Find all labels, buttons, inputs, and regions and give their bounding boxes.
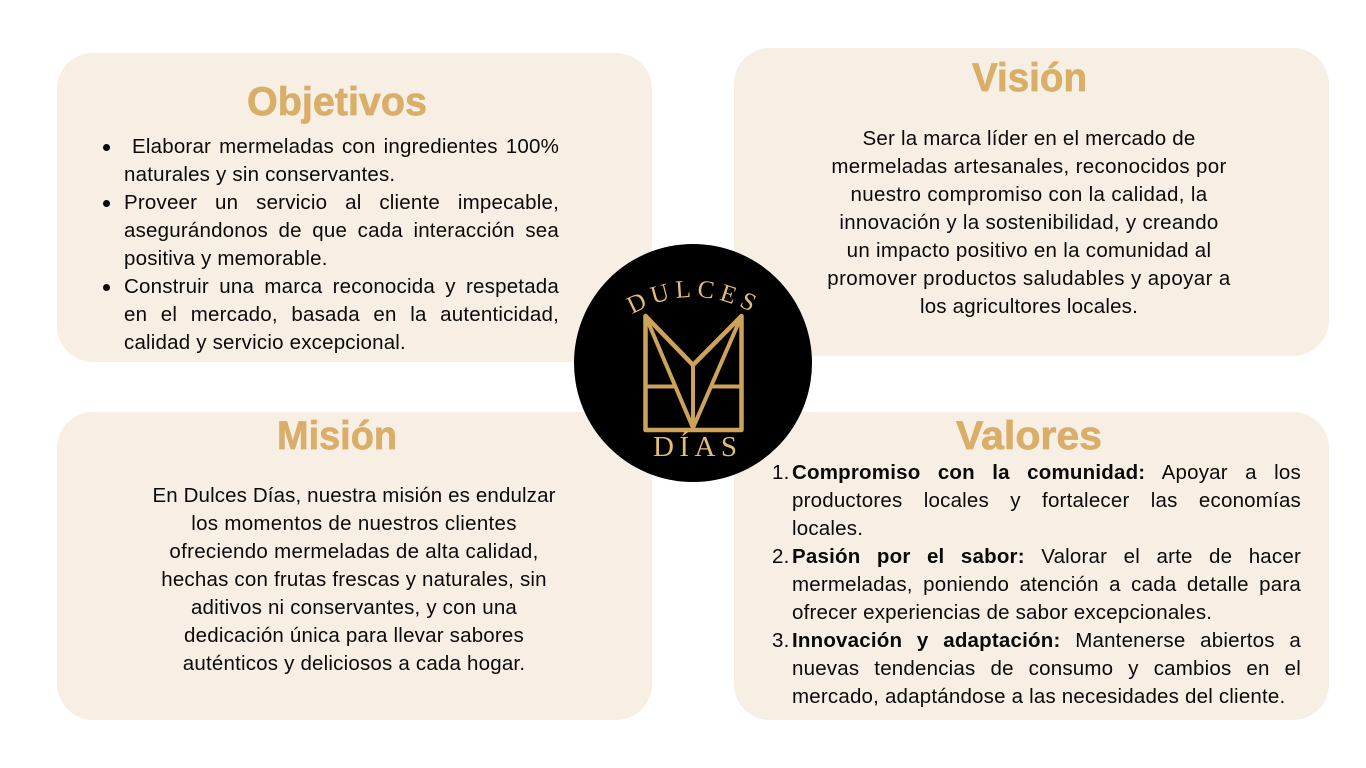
vision text: promover productos saludables y apoyar a: [827, 267, 1231, 290]
objetivos list: [103, 135, 559, 354]
vision text: [827, 127, 1231, 318]
valores list: Pasión por el sabor: Valorar el arte de hacer: [792, 545, 1301, 568]
logo text: DÍAS: DÍAS: [653, 430, 737, 463]
valores list: [772, 461, 1301, 708]
objetivos list: positiva y memorable.: [124, 247, 328, 270]
mision text: los momentos de nuestros clientes: [191, 512, 517, 535]
objetivos list: Proveer un servicio al cliente impecable,: [124, 191, 559, 214]
panel: mision: [57, 412, 652, 720]
vision text: los agricultores locales.: [920, 295, 1138, 318]
valores list: nuevas tendencias de consumo y cambios en el: [792, 657, 1301, 680]
vision text: nuestro compromiso con la calidad, la: [850, 183, 1208, 206]
valores list: mermeladas, poniendo atención a cada detalle para: [792, 573, 1301, 596]
mision text: dedicación única para llevar sabores: [184, 624, 524, 647]
valores list: ofrecer experiencias de sabor excepcionales.: [792, 601, 1212, 624]
objetivos list: en el mercado, basada en la autenticidad,: [124, 303, 559, 326]
valores list: locales.: [792, 517, 863, 540]
valores list: Compromiso con la comunidad: Apoyar a los: [792, 461, 1301, 484]
objetivos list: naturales y sin conservantes.: [124, 163, 395, 186]
heading: Visión: Visión: [972, 56, 1087, 100]
vision text: Ser la marca líder en el mercado de: [863, 127, 1195, 150]
heading: Misión: Misión: [277, 414, 397, 458]
objetivos list: Elaborar mermeladas con ingredientes 100%: [132, 135, 559, 158]
valores list: 3.: [772, 629, 790, 652]
objetivos list: Construir una marca reconocida y respetada: [124, 275, 559, 298]
vision text: innovación y la sostenibilidad, y creando: [839, 211, 1219, 234]
objetivos list: asegurándonos de que cada interacción sea: [124, 219, 559, 242]
logo text: DULCES: DULCES: [626, 281, 756, 314]
panel: valores: [734, 412, 1329, 720]
panel: objetivos: [57, 53, 652, 362]
mision text: ofreciendo mermeladas de alta calidad,: [169, 540, 539, 563]
mision text: En Dulces Días, nuestra misión es endulzar: [152, 484, 556, 507]
valores list: 1.: [772, 461, 790, 484]
valores list: Innovación y adaptación: Mantenerse abiertos a: [792, 629, 1301, 652]
valores list: productores locales y fortalecer las economías: [792, 489, 1301, 512]
mision text: auténticos y deliciosos a cada hogar.: [183, 652, 525, 675]
mision text: aditivos ni conservantes, y con una: [191, 596, 517, 619]
vision text: un impacto positivo en la comunidad al: [847, 239, 1211, 262]
mision text: hechas con frutas frescas y naturales, sin: [161, 568, 547, 591]
valores list: 2.: [772, 545, 790, 568]
valores list: mercado, adaptándose a las necesidades del cliente.: [792, 685, 1285, 708]
logo: Dulces Días: [574, 244, 812, 482]
mision text: [152, 484, 556, 675]
vision text: mermeladas artesanales, reconocidos por: [831, 155, 1227, 178]
objetivos list: calidad y servicio excepcional.: [124, 331, 406, 354]
panel: vision: [734, 48, 1329, 356]
heading: Objetivos: Objetivos: [247, 80, 427, 124]
heading: Valores: Valores: [956, 414, 1102, 458]
logo monogram: [646, 316, 742, 430]
